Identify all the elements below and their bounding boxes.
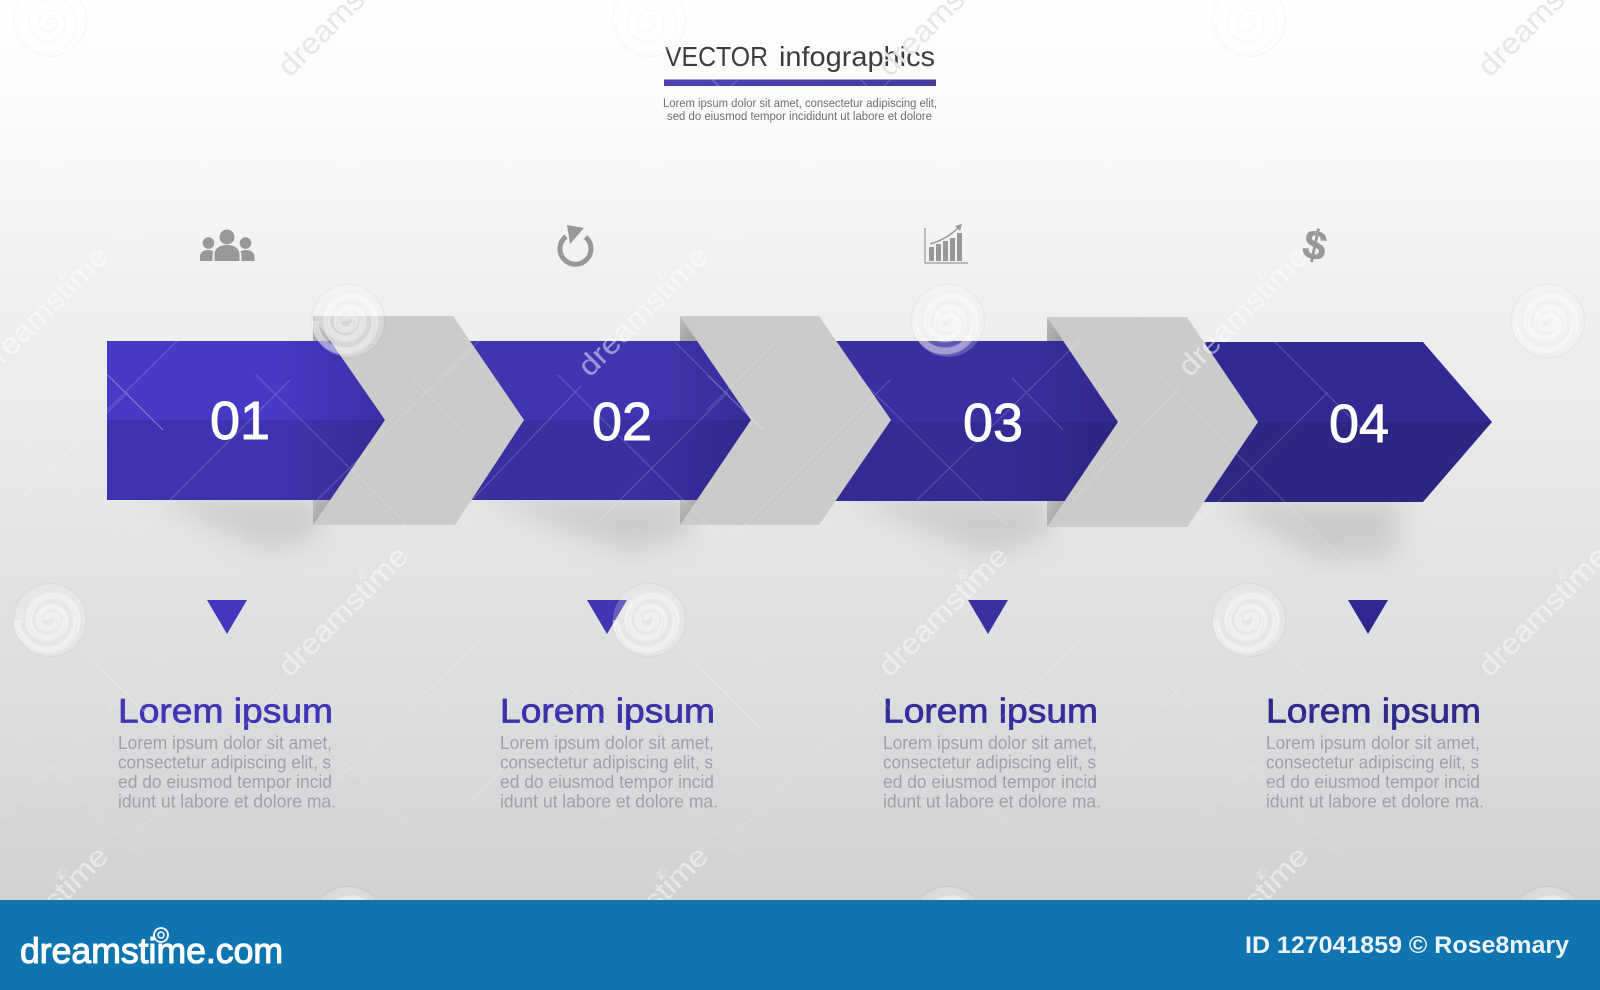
column 2	[500, 600, 718, 812]
body 2: ed do eiusmod tempor incid	[500, 772, 714, 792]
watermark overlay: dreamstime	[572, 840, 715, 983]
step numbers	[210, 391, 1389, 454]
heading 1: Lorem ipsum	[118, 692, 333, 730]
subtitle: sed do eiusmod tempor incididunt ut labore et dolore	[667, 111, 932, 123]
watermark overlay: dreamstime	[1172, 240, 1315, 383]
grey chevron 3	[1047, 317, 1258, 527]
column 4	[1266, 600, 1484, 812]
icon: refresh arrow	[560, 225, 591, 264]
body 1: consectetur adipiscing elit, s	[118, 752, 331, 772]
arrow band 04	[1170, 342, 1492, 502]
arrow band 01	[107, 341, 385, 500]
step numbers: 01	[210, 391, 270, 451]
watermark overlay: dreamstime	[572, 240, 715, 383]
body 3: consectetur adipiscing elit, s	[883, 752, 1096, 772]
arrow band 03	[800, 341, 1118, 501]
body 4: consectetur adipiscing elit, s	[1266, 752, 1479, 772]
header	[663, 41, 937, 123]
watermark overlay: dreamstime	[272, 540, 415, 683]
watermark overlay: ©	[953, 564, 972, 583]
body 4: ed do eiusmod tempor incid	[1266, 772, 1480, 792]
title: infographics	[779, 41, 935, 72]
body 1: Lorem ipsum dolor sit amet,	[118, 733, 332, 753]
footer bar	[0, 900, 1600, 990]
subtitle: Lorem ipsum dolor sit amet, consectetur adipiscing elit,	[663, 98, 937, 110]
title underline	[664, 80, 936, 86]
heading 4: Lorem ipsum	[1266, 692, 1481, 730]
body 3: ed do eiusmod tempor incid	[883, 772, 1097, 792]
watermark overlay: ©	[353, 564, 372, 583]
band shadows	[150, 498, 1400, 560]
icon: dollar: $	[1299, 220, 1331, 270]
pointer 1	[207, 600, 247, 634]
body 4: Lorem ipsum dolor sit amet,	[1266, 733, 1480, 753]
footer credit: ID 127041859 © Rose8mary	[1245, 932, 1569, 959]
heading 3: Lorem ipsum	[883, 692, 1098, 730]
pointer 4	[1348, 600, 1388, 634]
title: VECTOR	[665, 41, 768, 72]
arrow band 02	[440, 341, 751, 500]
body 2: consectetur adipiscing elit, s	[500, 752, 713, 772]
body 1: ed do eiusmod tempor incid	[118, 772, 332, 792]
watermark overlay: dreamstime	[872, 540, 1015, 683]
body 3: idunt ut labore et dolore ma.	[883, 792, 1101, 812]
body 2: Lorem ipsum dolor sit amet,	[500, 733, 714, 753]
icon: people	[200, 230, 254, 261]
watermark overlay: ©	[1253, 864, 1272, 883]
watermark overlay: ©	[53, 264, 72, 283]
footer logo: dreamstime.com	[20, 930, 283, 971]
body 1: idunt ut labore et dolore ma.	[118, 792, 336, 812]
column 1	[118, 600, 336, 812]
step numbers: 02	[592, 392, 652, 452]
watermark overlay: ©	[1553, 564, 1572, 583]
column 3	[883, 600, 1101, 812]
body 2: idunt ut labore et dolore ma.	[500, 792, 718, 812]
pointer 2	[587, 600, 627, 634]
watermark overlay: ©	[53, 864, 72, 883]
step numbers: 04	[1329, 394, 1389, 454]
body 4: idunt ut labore et dolore ma.	[1266, 792, 1484, 812]
icon: growth chart	[925, 224, 968, 263]
heading 2: Lorem ipsum	[500, 692, 715, 730]
watermark overlay: ©	[653, 264, 672, 283]
grey chevron 1	[313, 316, 524, 525]
watermark overlay: ©	[653, 864, 672, 883]
pointer 3	[968, 600, 1008, 634]
watermark overlay: ©	[1253, 264, 1272, 283]
grey chevron 2	[680, 316, 891, 525]
watermark overlay: dreamstime	[1172, 840, 1315, 983]
step numbers: 03	[963, 393, 1023, 453]
body 3: Lorem ipsum dolor sit amet,	[883, 733, 1097, 753]
